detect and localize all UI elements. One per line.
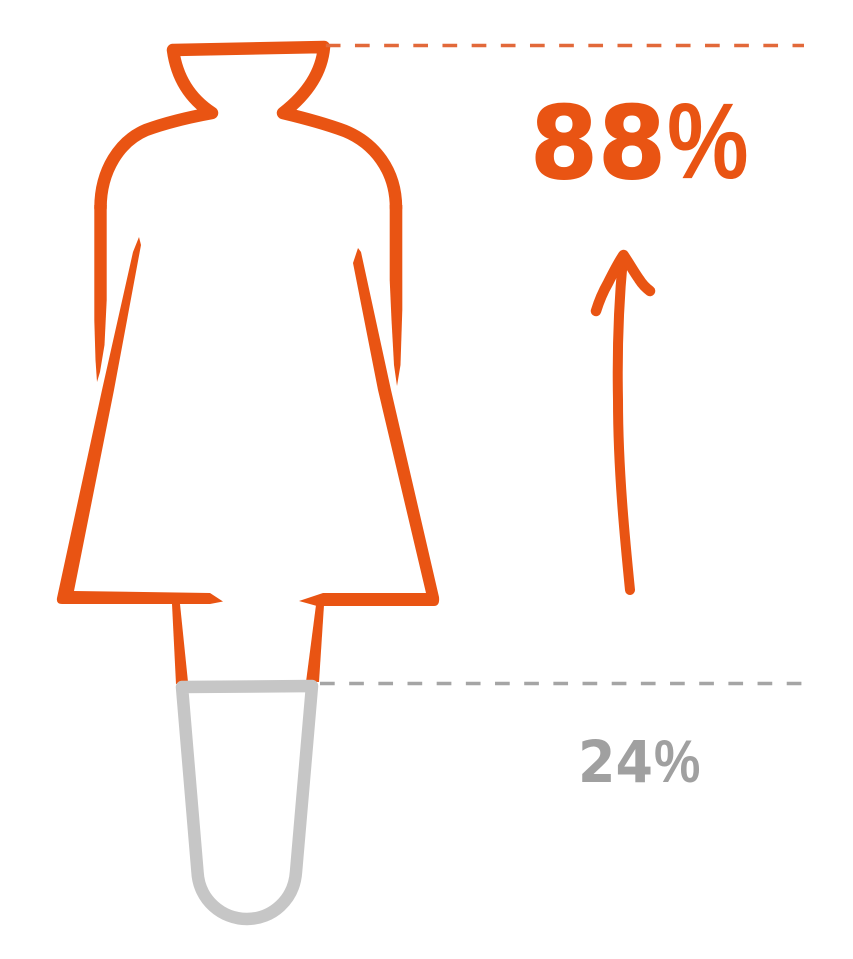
left skirt [57, 237, 223, 604]
arrow head [596, 255, 650, 311]
left arm [94, 205, 107, 382]
figure: orange upper body outline [57, 47, 439, 684]
figure: grey lower leg [182, 686, 312, 919]
left upper leg [172, 604, 188, 684]
arrow shaft [618, 258, 630, 590]
dashed line: 24% level [320, 682, 804, 685]
value: 24% [578, 728, 700, 796]
value: 88% [530, 81, 749, 202]
arrow: upward [596, 255, 650, 590]
head and shoulders outline [100, 47, 396, 208]
percent sign: % [667, 81, 749, 202]
right skirt [299, 248, 439, 606]
digits 88: 88 [530, 84, 666, 202]
right upper leg [306, 605, 324, 682]
right arm [390, 205, 402, 386]
digits 24: 24 [578, 728, 653, 796]
dashed line: 88% level [326, 44, 804, 47]
percent sign: % [654, 728, 700, 795]
